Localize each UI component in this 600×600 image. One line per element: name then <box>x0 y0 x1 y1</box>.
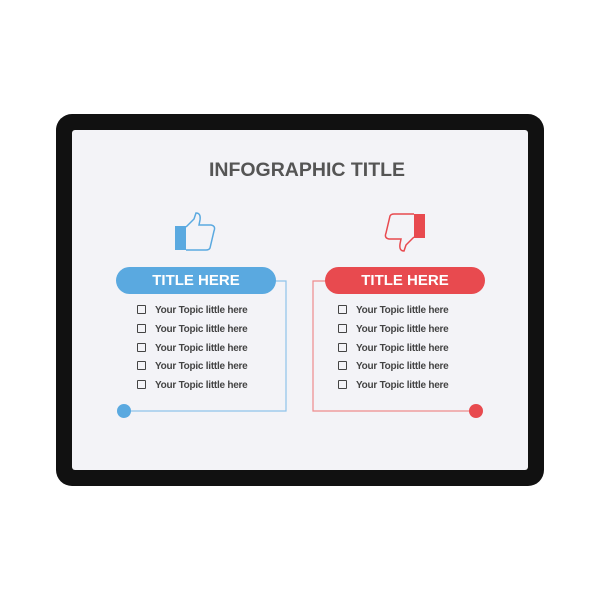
pill: left title: TITLE HERE <box>152 272 240 289</box>
icon: thumbs up <box>175 212 216 251</box>
list: right: Your Topic little here <box>356 305 448 316</box>
tablet frame <box>56 114 544 486</box>
pill: right title: TITLE HERE <box>361 272 449 289</box>
list: right: Your Topic little here <box>356 324 448 335</box>
list: right: Your Topic little here <box>356 361 448 372</box>
list: right <box>338 305 448 391</box>
pill: left title <box>116 267 276 294</box>
list: left <box>137 305 248 391</box>
list: left: Your Topic little here <box>155 361 247 372</box>
list: right: Your Topic little here <box>356 380 448 391</box>
title: INFOGRAPHIC TITLE <box>209 159 405 181</box>
list: left: Your Topic little here <box>155 305 247 316</box>
list: right: Your Topic little here <box>356 343 448 354</box>
list: left: Your Topic little here <box>155 343 247 354</box>
list: left: Your Topic little here <box>155 380 247 391</box>
list: left: Your Topic little here <box>155 324 247 335</box>
pill: right title <box>325 267 485 294</box>
screen <box>72 130 528 470</box>
icon: thumbs down <box>384 213 425 252</box>
